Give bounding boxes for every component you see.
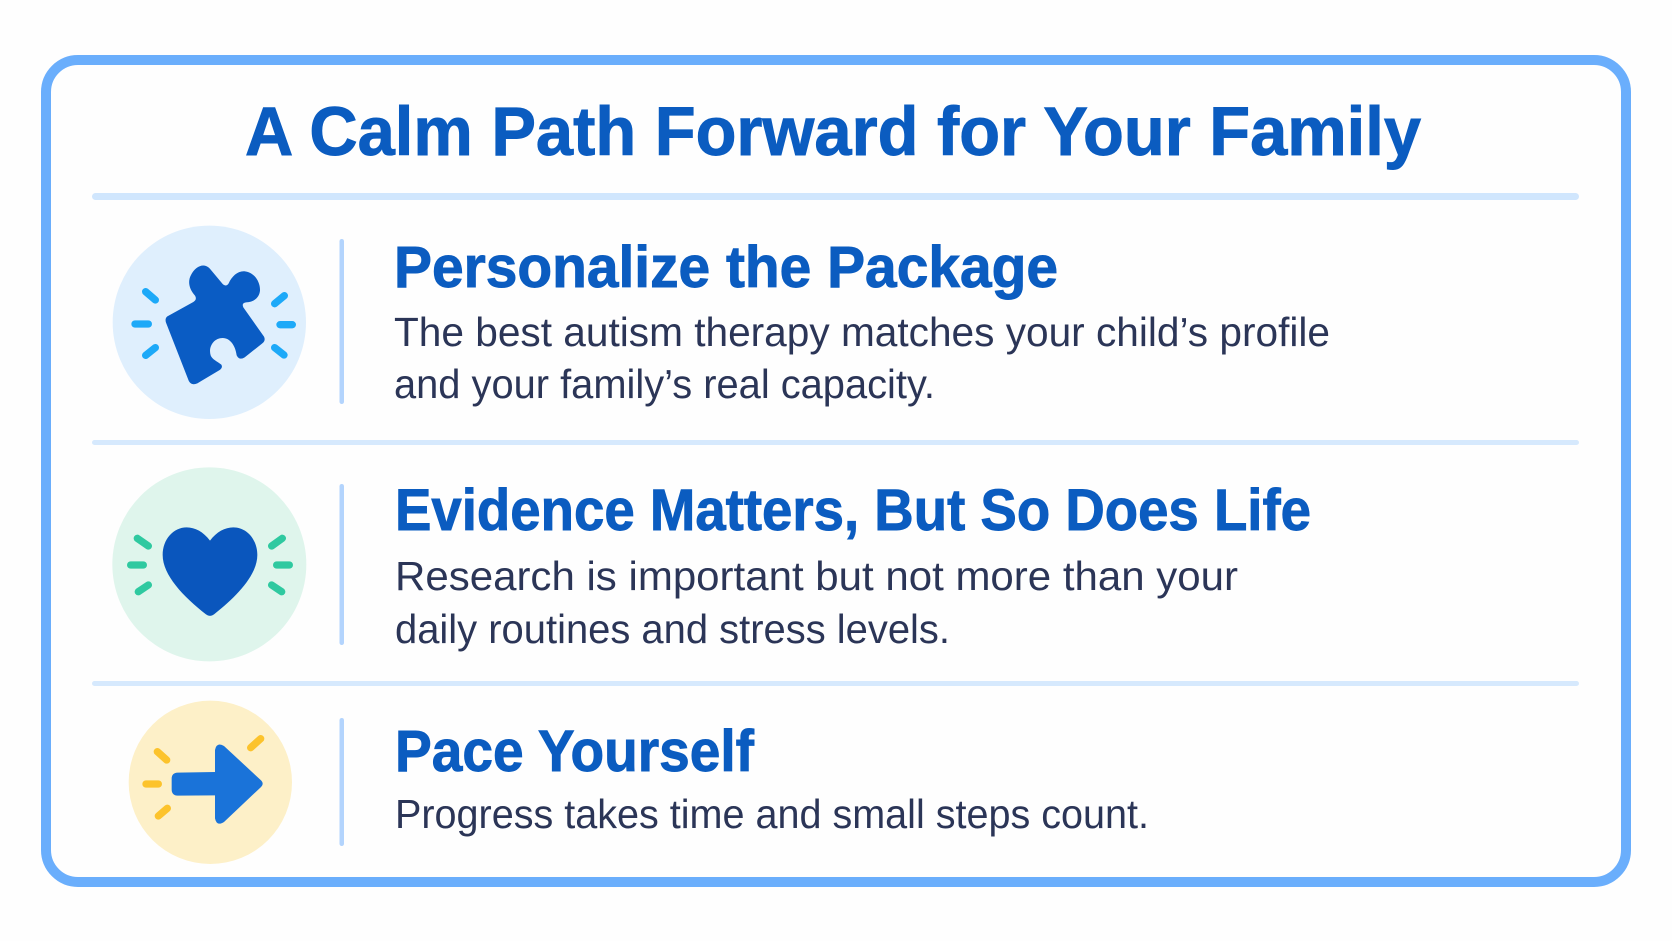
panel: pace yourself: [129, 701, 1149, 864]
panel: evidence matters: [112, 467, 1311, 661]
vertical separator: [340, 484, 344, 645]
heading: personalize the package: Personalize the Package: [394, 235, 1058, 300]
text block: pace description: Progress takes time and small steps count.: [395, 791, 1149, 837]
heading: pace yourself: Pace Yourself: [395, 719, 755, 784]
text block: personalize description: The best autism therapy matches your child’s profile: [394, 309, 1330, 355]
text block: evidence description: [395, 553, 1238, 652]
icon: heart: [112, 467, 306, 661]
vertical separator: [340, 718, 344, 846]
vertical separator: [340, 239, 344, 404]
text block: evidence description: Research is important but not more than your: [395, 553, 1238, 599]
panel: personalize the package: [113, 226, 1330, 419]
heading: evidence matters: Evidence Matters, But So Does Life: [395, 478, 1311, 543]
text block: personalize description: and your family’s real capacity.: [394, 361, 935, 407]
icon: puzzle piece: [113, 226, 306, 419]
title: A Calm Path Forward for Your Family: [245, 93, 1421, 170]
text block: evidence description: daily routines and stress levels.: [395, 606, 950, 652]
text block: personalize description: [394, 309, 1330, 407]
icon: arrow: [129, 701, 292, 864]
